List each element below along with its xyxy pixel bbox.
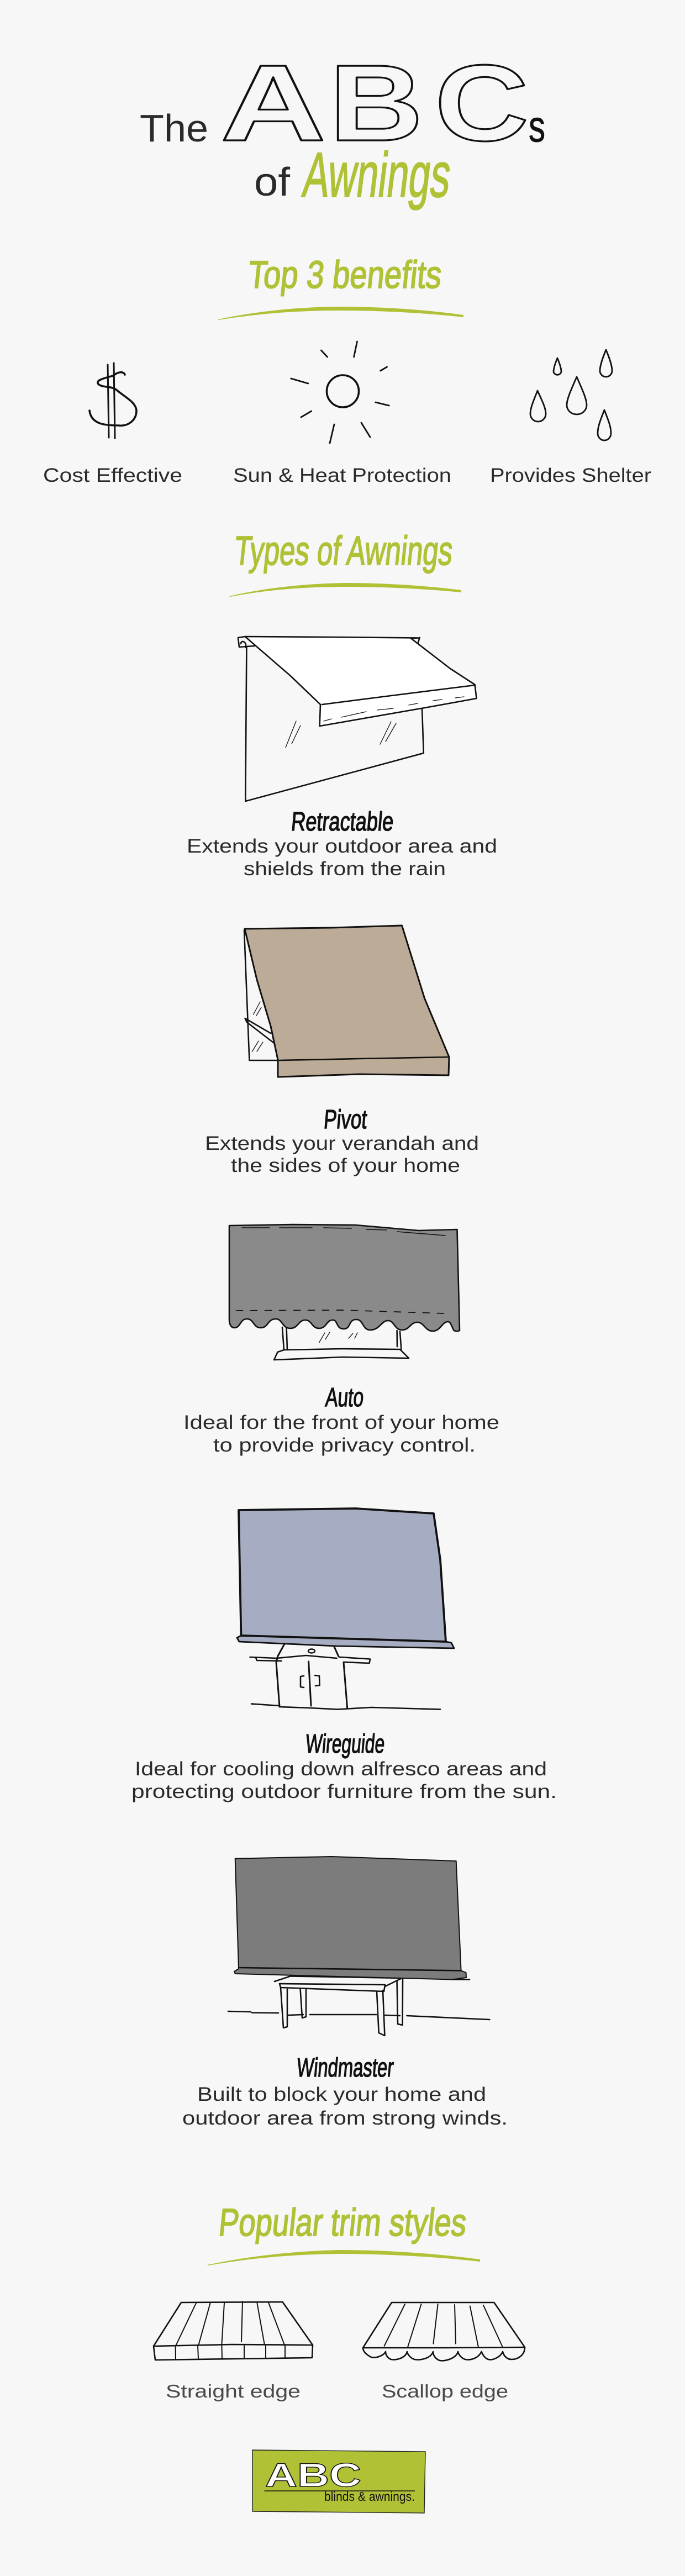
benefit: cost effective: Cost Effective xyxy=(43,465,182,486)
heading: top 3 benefits: Top 3 benefits xyxy=(246,253,444,296)
panel: pivot awning xyxy=(205,926,479,1176)
trim style: scallop edge: Scallop edge xyxy=(382,2381,508,2401)
icon: rain drops xyxy=(530,350,612,440)
panel: pivot awning: Pivot xyxy=(323,1105,368,1134)
heading: popular trim styles xyxy=(207,2200,480,2265)
panel: auto awning: Ideal for the front of your home xyxy=(183,1412,499,1433)
title: The xyxy=(140,107,208,150)
title: of xyxy=(254,160,291,204)
panel: pivot awning: Extends your verandah and xyxy=(205,1133,479,1154)
panel: retractable awning: shields from the rain xyxy=(244,858,446,880)
panel: wireguide awning: Ideal for cooling down alfresco areas and xyxy=(135,1758,547,1780)
panel: wireguide awning: protecting outdoor furniture from the sun. xyxy=(131,1781,557,1802)
benefit: sun and heat protection: Sun & Heat Protection xyxy=(233,465,451,486)
title: B xyxy=(329,43,423,164)
illustration: pivot xyxy=(244,926,449,1077)
icon: dollar sign xyxy=(89,363,136,438)
panel: retractable awning: Retractable xyxy=(290,807,395,837)
illustration: scallop edge awning xyxy=(363,2302,525,2361)
illustration: straight edge awning xyxy=(154,2301,313,2360)
panel: windmaster awning: Windmaster xyxy=(296,2053,395,2083)
panel: wireguide awning xyxy=(131,1508,557,1802)
benefit: cost effective xyxy=(43,363,182,486)
benefit: provides shelter xyxy=(490,350,651,486)
title: A xyxy=(220,43,326,164)
benefit: provides shelter: Provides Shelter xyxy=(490,465,651,486)
heading: top 3 benefits xyxy=(218,253,463,320)
heading: types of awnings: Types of Awnings xyxy=(232,528,455,574)
panel: windmaster awning xyxy=(182,1857,508,2129)
heading: types of awnings xyxy=(229,528,461,597)
logo: blinds & awnings. xyxy=(324,2489,415,2504)
panel: retractable awning xyxy=(187,637,497,880)
title: Awnings xyxy=(299,140,455,211)
panel: windmaster awning: Built to block your home and xyxy=(197,2084,486,2105)
trim style: scallop edge xyxy=(363,2302,525,2401)
illustration: windmaster xyxy=(228,1857,489,2036)
title: s xyxy=(529,102,545,151)
benefit: sun and heat protection xyxy=(233,341,451,486)
panel: pivot awning: the sides of your home xyxy=(231,1155,460,1176)
panel: auto awning xyxy=(183,1224,499,1456)
logo xyxy=(252,2450,425,2513)
title: C xyxy=(435,43,529,164)
heading: popular trim styles: Popular trim styles xyxy=(217,2200,469,2244)
illustration: auto xyxy=(229,1224,460,1360)
panel: wireguide awning: Wireguide xyxy=(304,1729,386,1759)
illustration: retractable xyxy=(238,637,476,801)
panel: auto awning: to provide privacy control. xyxy=(213,1434,476,1456)
panel: retractable awning: Extends your outdoor area and xyxy=(187,835,497,857)
trim style: straight edge xyxy=(154,2301,313,2401)
trim style: straight edge: Straight edge xyxy=(166,2381,301,2401)
panel: windmaster awning: outdoor area from strong winds. xyxy=(182,2107,508,2129)
illustration: wireguide xyxy=(237,1508,454,1710)
panel: auto awning: Auto xyxy=(324,1382,365,1412)
logo: ABC xyxy=(265,2457,361,2494)
title xyxy=(140,43,545,211)
icon: sun xyxy=(291,341,389,443)
